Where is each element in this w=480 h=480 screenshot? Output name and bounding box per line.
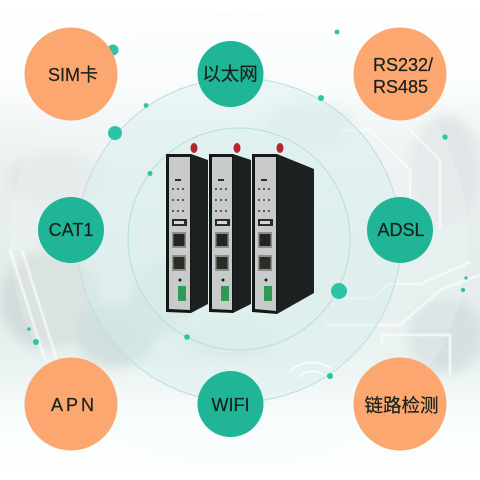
badge: CAT1 xyxy=(38,197,104,263)
badge: RS232/RS485 xyxy=(354,28,446,120)
badge: WIFI xyxy=(198,371,264,437)
badge: link detection xyxy=(354,358,446,450)
inner ring xyxy=(128,128,350,350)
device group: three gateways xyxy=(166,143,314,314)
badge: APN xyxy=(24,358,118,450)
badge: ADSL xyxy=(367,197,433,263)
device 3 xyxy=(252,143,314,314)
badge: RS232/RS485: RS232/ xyxy=(373,55,433,75)
badge: APN: APN xyxy=(51,395,97,415)
badge: CAT1: CAT1 xyxy=(49,220,93,240)
badge: SIM card xyxy=(24,28,118,120)
badge: Ethernet xyxy=(198,41,264,107)
badge: WIFI: WIFI xyxy=(212,395,250,415)
device 1 xyxy=(166,143,208,313)
accent dots xyxy=(27,30,468,379)
wifi arcs watermark xyxy=(290,363,330,378)
badge: SIM card: SIM卡 xyxy=(48,65,98,85)
badge: Ethernet: 以太网 xyxy=(202,64,258,84)
badge: link detection: 链路检测 xyxy=(364,395,439,416)
badge: RS232/RS485: RS485 xyxy=(373,77,428,97)
device 2 xyxy=(209,143,251,313)
middle ring xyxy=(77,78,401,402)
badge: ADSL: ADSL xyxy=(377,220,425,240)
